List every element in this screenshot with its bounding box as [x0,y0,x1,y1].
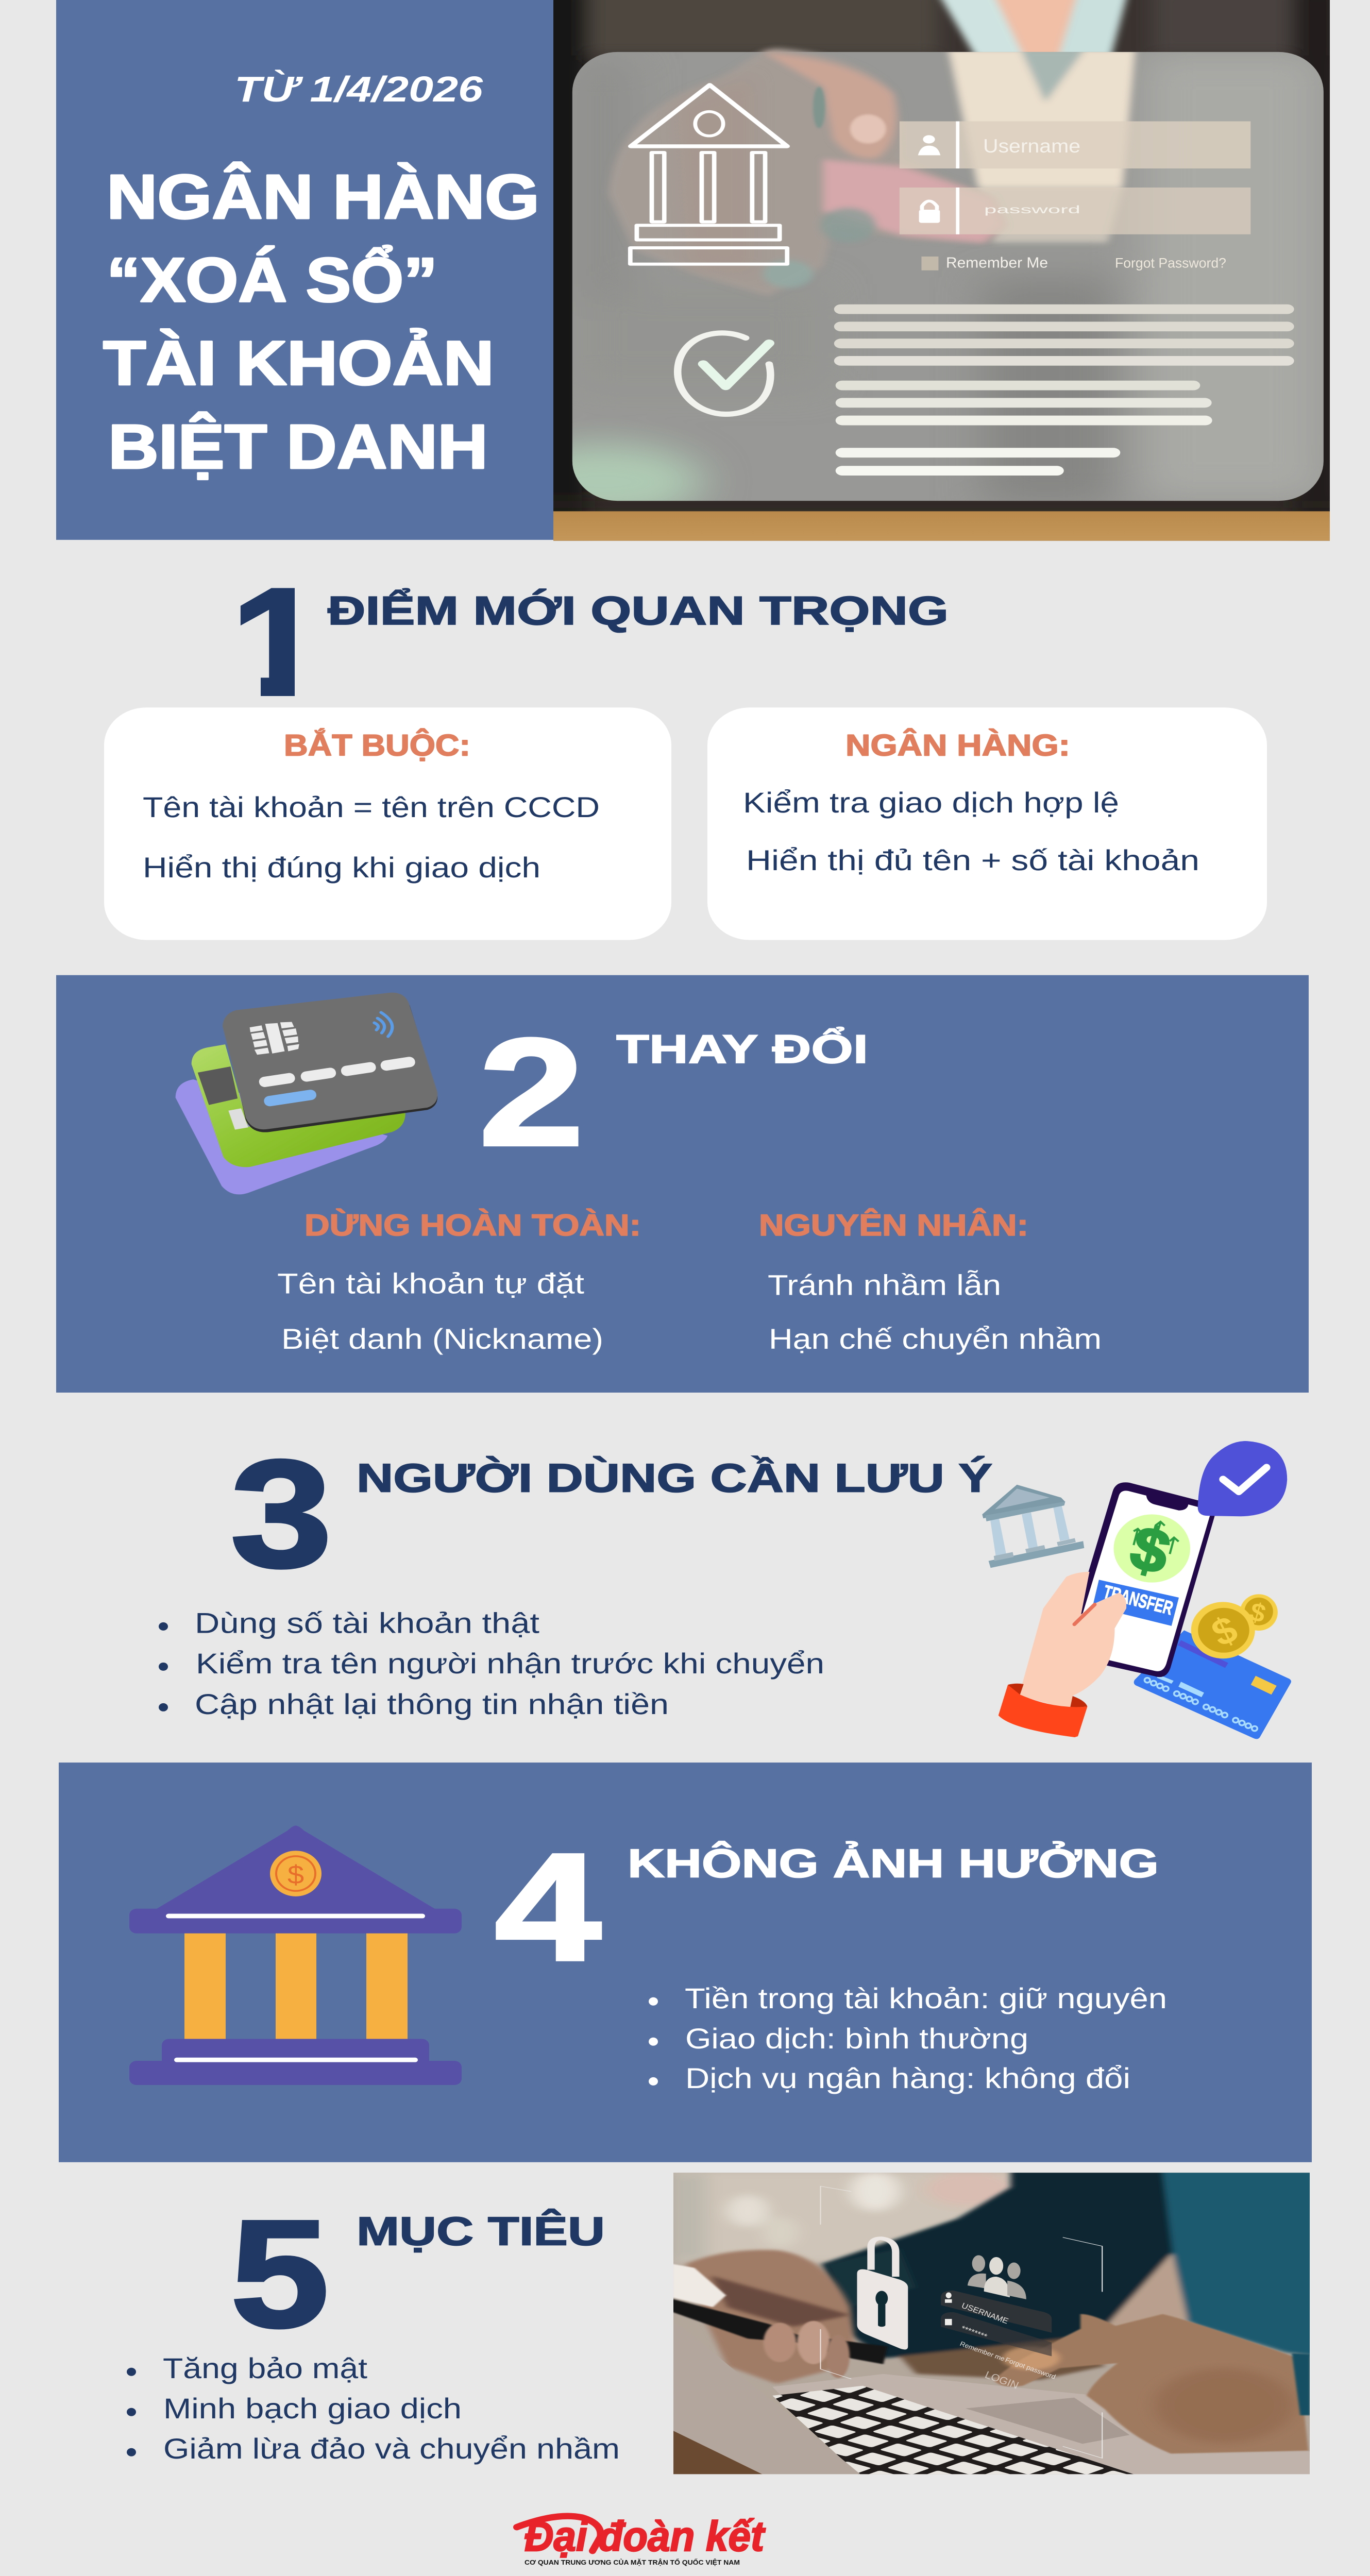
bullet list [159,1607,824,1720]
bullet list: Minh bạch giao dịch [163,2392,462,2425]
contactless waves [374,1012,392,1037]
number 5: 5 [230,2189,329,2360]
login fields [941,2291,1052,2357]
login labels: Username [983,135,1080,157]
panel: ngân hàng: Kiểm tra giao dịch hợp lệ [743,786,1119,819]
panel: bắt buộc: Hiển thị đúng khi giao dịch [143,851,540,884]
laptop [670,2323,1314,2478]
login labels: Remember Me [946,255,1048,271]
heading: KHÔNG ẢNH HƯỞNG [628,1840,1159,1886]
panel: ngân hàng: Hiển thị đủ tên + số tài khoản [746,844,1199,876]
hand [608,48,1005,296]
bullet list: Tăng bảo mật [163,2352,367,2384]
heading: ĐIỂM MỚI QUAN TRỌNG [328,588,949,633]
section 2 panel [56,975,1309,1393]
column: dừng hoàn toàn: Biệt danh (Nickname) [281,1323,603,1355]
tagline: CƠ QUAN TRUNG ƯƠNG CỦA MẶT TRẬN TỔ QUỐC VIỆT NAM [525,2558,740,2567]
main title: NGÂN HÀNG [107,162,539,232]
phone [1079,1482,1218,1677]
main title: TÀI KHOẢN [103,328,494,398]
bullet list: Dịch vụ ngân hàng: không đổi [685,2062,1130,2094]
icon: bank with coin [129,1825,462,2085]
icon: bank outline [630,85,787,264]
coins: $ [1205,1607,1244,1654]
photo overlay labels: LOGIN [983,2369,1021,2391]
main title: BIỆT DANH [108,412,488,482]
section 4 panel [59,1762,1312,2162]
bank card [1134,1630,1291,1739]
password field [900,188,1250,234]
logo: Đại đoàn kết: Đại đoàn kết [525,2513,766,2560]
icon: bank with coin: $ [287,1859,304,1889]
section 1 [104,556,1267,940]
icon: check badge [1198,1441,1287,1516]
panel: ngân hàng: NGÂN HÀNG: [845,728,1070,762]
bullet list: Dùng số tài khoản thật [195,1607,540,1639]
username field [900,121,1250,168]
icon: check mark circle [678,333,770,414]
section 5 [127,2170,1318,2478]
coins [1191,1594,1278,1658]
bullet list: Giao dịch: bình thường [685,2022,1028,2055]
panel: bắt buộc [104,707,671,940]
photo overlay labels: ******** [959,2324,989,2341]
login labels [946,135,1226,271]
right hand [994,2314,1310,2453]
bullet list: Cập nhật lại thông tin nhận tiền [195,1688,669,1720]
column: dừng hoàn toàn: DỪNG HOÀN TOÀN: [305,1209,641,1242]
section 3 [159,1428,1291,1739]
column: nguyên nhân: NGUYÊN NHÂN: [759,1208,1028,1242]
bullet list: Kiểm tra tên người nhận trước khi chuyển [196,1648,824,1680]
number 4: 4 [495,1822,602,1993]
panel: bắt buộc: BẮT BUỘC: [284,728,470,762]
date line: TỪ 1/4/2026 [234,69,483,109]
icon: padlock [857,2239,908,2349]
left hand and phone [670,2250,887,2384]
bullet list [649,1982,1167,2094]
hero photo: glass login panel [503,0,1352,546]
number 1: 1 [230,556,326,727]
photo overlay labels: USERNAME [960,2301,1010,2326]
column: dừng hoàn toàn: Tên tài khoản tự đặt [277,1267,585,1300]
panel: bắt buộc: Tên tài khoản = tên trên CCCD [143,791,600,823]
number 3: 3 [230,1428,332,1600]
hand and cuff [999,1572,1126,1737]
photo overlay labels: Remember me [959,2340,1006,2363]
bullet list [127,2352,620,2465]
text lines on the glass panel [834,304,1294,476]
phone: $ [1123,1513,1177,1588]
heading: THAY ĐỔI [616,1027,868,1072]
coins: $ [1246,1597,1269,1628]
chip [250,1022,299,1055]
icon: people [968,2255,1026,2299]
photo overlay labels [959,2301,1057,2391]
bullet list: Giảm lừa đảo và chuyển nhầm [163,2433,620,2465]
panel: ngân hàng [707,707,1267,940]
phone: TRANSFER [1101,1582,1175,1619]
column: nguyên nhân: Hạn chế chuyển nhầm [769,1323,1102,1355]
photo overlay labels: Forgot password [1004,2356,1057,2381]
number 2: 2 [479,1007,584,1178]
heading: MỤC TIÊU [357,2209,605,2253]
hero title panel [56,0,553,540]
main title: “XOÁ SỔ” [107,245,437,315]
column: nguyên nhân [759,1208,1102,1355]
column: dừng hoàn toàn [277,1209,641,1355]
illustration: phone transfer [982,1441,1291,1739]
main title [103,162,539,482]
icon: stacked bank cards [176,993,437,1194]
login labels: Forgot Password? [1115,256,1226,271]
heading: NGƯỜI DÙNG CẦN LƯU Ý [357,1455,992,1500]
remember checkbox [921,257,938,270]
login labels: password [984,203,1080,216]
bullet list: Tiền trong tài khoản: giữ nguyên [685,1982,1167,2014]
corner brackets [820,2186,1102,2458]
photo: hands on laptop with security overlay [670,2170,1318,2478]
icon: bank [982,1485,1084,1568]
column: nguyên nhân: Tránh nhầm lẫn [768,1269,1001,1301]
card number dashes [258,1056,416,1107]
